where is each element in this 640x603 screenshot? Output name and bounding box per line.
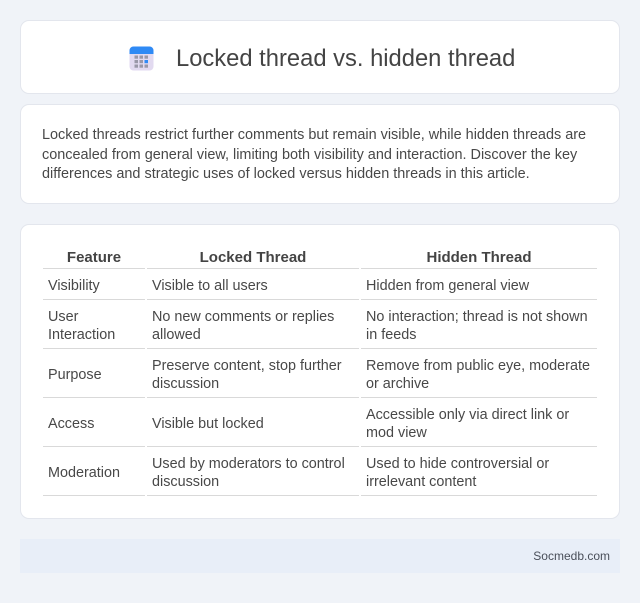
row: moderation: Moderation (48, 465, 120, 481)
panel: comparison table (20, 224, 620, 519)
footer source text: Socmedb.com (533, 549, 610, 563)
row: purpose: or archive (366, 376, 429, 392)
icon: calendar (130, 46, 154, 70)
row: user interaction: No new comments or replies (152, 309, 334, 325)
row: visibility (48, 278, 530, 294)
row: visibility: Hidden from general view (366, 278, 529, 294)
row: user interaction: Interaction (48, 327, 115, 343)
row: moderation: Used to hide controversial or (366, 456, 549, 472)
table header (67, 249, 532, 266)
row: purpose: Remove from public eye, moderate (366, 358, 590, 374)
row: purpose: Purpose (48, 367, 102, 383)
row: user interaction: in feeds (366, 327, 416, 343)
row: access: Access (48, 416, 94, 432)
row: access: Visible but locked (152, 416, 264, 432)
intro text: differences and strategic uses of locked versus hidden threads in this article. (42, 166, 530, 182)
row: moderation (48, 456, 549, 490)
panel: introduction (20, 104, 620, 204)
panel: title (20, 20, 620, 94)
intro text: Locked threads restrict further comments but remain visible, while hidden threads are (42, 127, 586, 143)
table header: Locked Thread (200, 249, 306, 266)
row: moderation: Used by moderators to control (152, 456, 345, 472)
table header: Feature (67, 249, 121, 266)
row: moderation: discussion (152, 474, 219, 490)
row: purpose: discussion (152, 376, 219, 392)
row: purpose: Preserve content, stop further (152, 358, 342, 374)
title text: Locked thread vs. hidden thread (176, 45, 515, 72)
row: user interaction: User (48, 309, 78, 325)
footer bar (20, 539, 620, 573)
row: access (48, 407, 569, 441)
row: purpose (48, 358, 590, 392)
row: access: mod view (366, 425, 427, 441)
row: user interaction (48, 309, 588, 343)
table header: Hidden Thread (426, 249, 532, 266)
intro text: concealed from general view, limiting both visibility and interaction. Discover the key (42, 146, 577, 162)
row: moderation: irrelevant content (366, 474, 476, 490)
row: user interaction: allowed (152, 327, 201, 343)
row: visibility: Visible to all users (152, 278, 268, 294)
row: user interaction: No interaction; thread is not shown (366, 309, 588, 325)
intro text (42, 127, 586, 182)
row: visibility: Visibility (48, 278, 100, 294)
row: access: Accessible only via direct link or (366, 407, 569, 423)
